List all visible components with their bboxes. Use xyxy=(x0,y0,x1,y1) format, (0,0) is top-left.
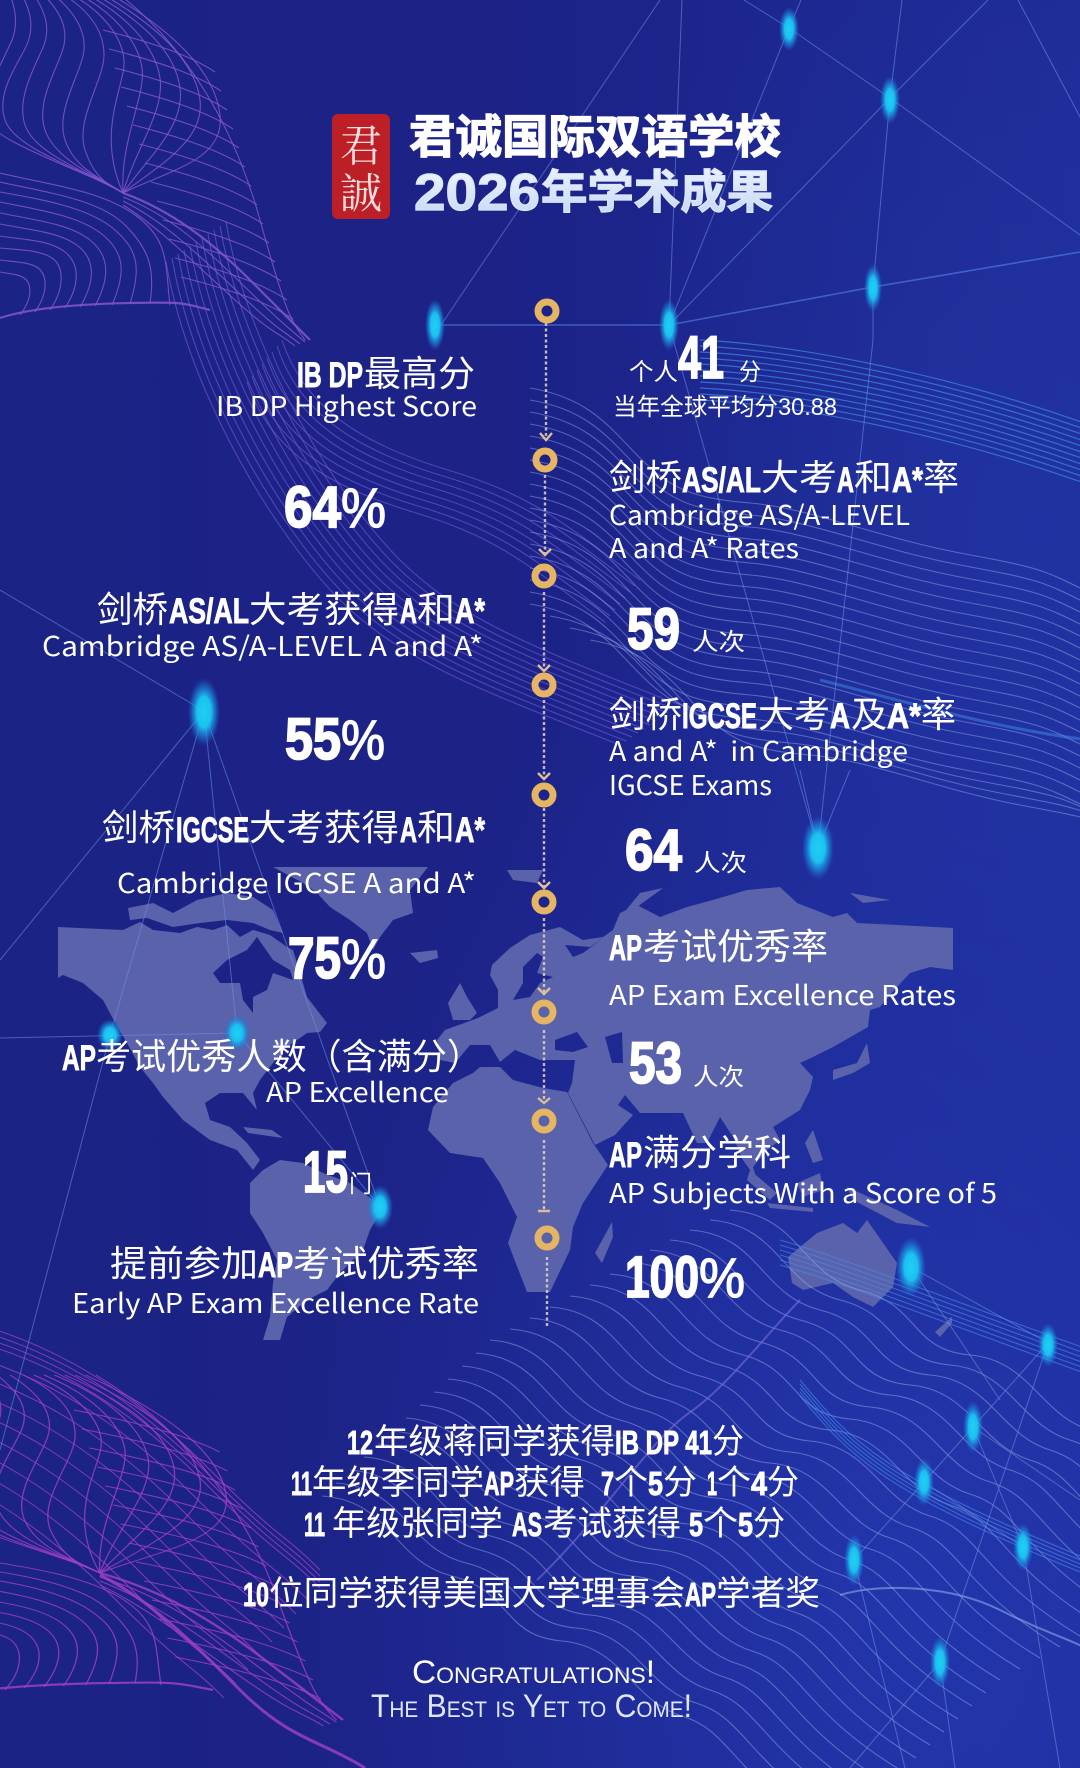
congratulations message xyxy=(371,1654,692,1724)
right: AP subjects with score of 5: AP xyxy=(609,1136,642,1175)
stat: 15 subjects: 门 xyxy=(349,1171,372,1198)
right: Cambridge AS/AL A and A* rates: 剑桥 xyxy=(609,457,682,498)
right: Cambridge IGCSE A and A* rates: A* xyxy=(887,697,921,736)
stat: 100%: % xyxy=(699,1246,745,1309)
student achievements: 获得 xyxy=(514,1464,585,1502)
student achievements: 11 xyxy=(291,1465,312,1502)
right: Cambridge AS/AL A and A* rates: Cambridge AS/A-LEVEL xyxy=(609,494,910,533)
stat: 55% xyxy=(285,707,385,772)
student achievements: 5 xyxy=(689,1506,703,1543)
AP scholar award: AP xyxy=(685,1576,716,1613)
stat: 53 xyxy=(629,1031,744,1096)
student achievements: 年级蒋同学获得 xyxy=(374,1423,615,1461)
student achievements: 个 xyxy=(717,1464,751,1502)
stat: 64%: % xyxy=(341,476,386,539)
stat: individual 41 points: 个人 xyxy=(629,359,678,386)
right: Cambridge IGCSE A and A* rates xyxy=(609,694,956,803)
logo seal: 君 xyxy=(340,110,382,174)
student achievements: 7 xyxy=(601,1465,614,1502)
stat: 15 subjects: 15 xyxy=(303,1140,348,1205)
wave: right blue-white field xyxy=(530,388,1080,845)
left: IB DP highest score: IB DP xyxy=(297,356,363,395)
stat: 75% xyxy=(288,926,386,991)
stat: individual 41 points: 41 xyxy=(678,324,724,391)
stat: 75%: 75 xyxy=(288,926,341,991)
wave: purple top-left mesh xyxy=(0,0,310,346)
right: Cambridge IGCSE A and A* rates: 大考 xyxy=(758,694,830,735)
AP scholar award: 10 xyxy=(243,1576,269,1613)
left: Cambridge AS/AL A and A*: AS/AL xyxy=(169,592,249,631)
timeline with rings and arrows xyxy=(535,302,556,1327)
stat: 100%: 100 xyxy=(625,1245,699,1310)
right: Cambridge IGCSE A and A* rates: 及 xyxy=(851,694,887,735)
right: Cambridge AS/AL A and A* rates: 率 xyxy=(923,457,959,498)
left: Cambridge IGCSE A and A*: 大考获得 xyxy=(249,807,399,848)
left: AP excellence: 考试优秀人数（含满分） xyxy=(96,1036,482,1077)
stat: 64: 64 xyxy=(625,818,682,883)
stat: 55%: 55 xyxy=(285,707,341,772)
left: Cambridge AS/AL A and A*: 和 xyxy=(417,589,455,630)
right: AP subjects with score of 5: 满分学科 xyxy=(643,1132,791,1173)
left: early AP excellence: Early AP Exam Excellence Rate xyxy=(72,1282,479,1321)
title: 君诚国际双语学校 xyxy=(409,101,781,167)
left: Cambridge AS/AL A and A*: A* xyxy=(455,592,485,631)
left: Cambridge AS/AL A and A*: Cambridge AS/A-LEVEL A and A* xyxy=(42,625,483,664)
right: Cambridge AS/AL A and A* rates: 和 xyxy=(854,457,892,498)
left: Cambridge IGCSE A and A*: A xyxy=(400,811,417,850)
left: AP excellence: AP Excellence xyxy=(266,1071,449,1110)
left: IB DP highest score: 最高分 xyxy=(364,353,475,394)
student achievements: 年级李同学 xyxy=(312,1464,484,1502)
wave: bottom-right bright strands xyxy=(537,1240,1080,1650)
logo seal: 誠 xyxy=(340,161,382,221)
student achievements: 5 xyxy=(648,1465,663,1502)
left: early AP excellence: 提前参加 xyxy=(110,1243,258,1284)
wave: right bright blue ribbon xyxy=(700,340,1080,740)
title: 2026 xyxy=(414,164,540,222)
student achievements: 4 xyxy=(751,1465,768,1502)
right: Cambridge IGCSE A and A* rates: IGCSE Exams xyxy=(609,764,772,803)
left: IB DP highest score xyxy=(216,353,477,424)
student achievements: IB DP 41 xyxy=(615,1424,712,1461)
student achievements: 1 xyxy=(707,1465,717,1502)
student achievements: 12 xyxy=(347,1424,373,1461)
student achievements: 分 xyxy=(767,1464,799,1502)
left: IB DP highest score: IB DP Highest Score xyxy=(216,385,477,424)
right: Cambridge IGCSE A and A* rates: A and A* in Cambridge xyxy=(609,730,908,769)
left: AP excellence xyxy=(62,1036,482,1110)
left: Cambridge IGCSE A and A*: Cambridge IGCSE A and A* xyxy=(117,862,476,901)
left: Cambridge AS/AL A and A*: 大考获得 xyxy=(249,589,399,630)
AP scholar award: 学者奖 xyxy=(716,1575,820,1613)
stat: individual 41 points: 当年全球平均分30.88 xyxy=(613,394,837,421)
right: AP subjects with score of 5: AP Subjects With a Score of 5 xyxy=(609,1172,997,1211)
congratulations message: Congratulations! xyxy=(412,1654,655,1690)
left: AP excellence: AP xyxy=(62,1039,96,1078)
right: Cambridge AS/AL A and A* rates: A xyxy=(837,461,854,500)
world map xyxy=(58,867,953,1340)
wave: bottom blue-white field xyxy=(322,1210,1080,1768)
right: Cambridge IGCSE A and A* rates: IGCSE xyxy=(682,697,757,736)
student achievements: AP xyxy=(484,1465,514,1502)
right: Cambridge AS/AL A and A* rates: AS/AL xyxy=(682,461,761,500)
right: AP exam excellence rates: 考试优秀率 xyxy=(643,926,828,967)
student achievements xyxy=(291,1423,799,1543)
stat: 64% xyxy=(284,475,386,540)
student achievements: 5 xyxy=(738,1506,753,1543)
congratulations message: The Best is Yet to Come! xyxy=(371,1688,692,1724)
student achievements: 个 xyxy=(703,1505,738,1543)
student achievements: 年级张同学 xyxy=(332,1505,503,1543)
left: Cambridge IGCSE A and A*: IGCSE xyxy=(176,811,249,850)
stat: 64%: 64 xyxy=(284,475,341,540)
stat: individual 41 points xyxy=(613,324,837,421)
left: Cambridge AS/AL A and A* xyxy=(42,589,485,664)
left: Cambridge IGCSE A and A* xyxy=(102,807,485,901)
stat: 53: 人次 xyxy=(693,1064,744,1091)
wave: magenta bottom-left mesh xyxy=(0,1328,365,1768)
student achievements: 考试获得 xyxy=(543,1505,681,1543)
stat: individual 41 points: 分 xyxy=(739,359,761,386)
right: Cambridge AS/AL A and A* rates xyxy=(609,457,959,566)
wave: purple ribbon through centre xyxy=(166,222,680,745)
student achievements: AS xyxy=(512,1506,542,1543)
right: Cambridge IGCSE A and A* rates: A xyxy=(830,697,850,736)
title: 年学术成果 xyxy=(541,156,773,222)
AP scholar award: 位同学获得美国大学理事会 xyxy=(269,1575,685,1613)
right: AP exam excellence rates: AP Exam Excellence Rates xyxy=(609,974,956,1013)
right: AP subjects with score of 5 xyxy=(609,1132,997,1211)
right: Cambridge AS/AL A and A* rates: A* xyxy=(892,461,923,500)
left: early AP excellence: 考试优秀率 xyxy=(293,1243,479,1284)
title xyxy=(409,101,781,222)
logo seal xyxy=(332,110,390,221)
left: early AP excellence xyxy=(72,1243,479,1321)
stat: 59: 59 xyxy=(627,597,680,662)
stat: 64: 人次 xyxy=(694,850,747,877)
stat: 75%: % xyxy=(341,927,386,990)
right: AP exam excellence rates: AP xyxy=(609,929,642,968)
student achievements: 分 xyxy=(712,1423,744,1461)
stat: 64 xyxy=(625,818,747,883)
right: AP exam excellence rates xyxy=(609,926,956,1013)
left: Cambridge IGCSE A and A*: 和 xyxy=(417,807,455,848)
student achievements: 个 xyxy=(614,1464,648,1502)
left: Cambridge IGCSE A and A*: A* xyxy=(455,811,485,850)
student achievements: 11 xyxy=(304,1506,325,1543)
left: early AP excellence: AP xyxy=(258,1246,293,1285)
left: Cambridge AS/AL A and A*: 剑桥 xyxy=(97,589,168,630)
stat: 55%: % xyxy=(341,708,385,771)
left: Cambridge AS/AL A and A*: A xyxy=(400,592,417,631)
stat: 59 xyxy=(627,597,745,662)
student achievements: 分 xyxy=(753,1505,785,1543)
stat: 59: 人次 xyxy=(692,629,745,656)
right: Cambridge AS/AL A and A* rates: A and A* Rates xyxy=(609,527,799,566)
right: Cambridge AS/AL A and A* rates: 大考 xyxy=(761,457,837,498)
student achievements: 分 xyxy=(663,1464,697,1502)
right: Cambridge IGCSE A and A* rates: 率 xyxy=(921,694,956,735)
right: Cambridge IGCSE A and A* rates: 剑桥 xyxy=(609,694,682,735)
left: Cambridge IGCSE A and A*: 剑桥 xyxy=(102,807,175,848)
stat: 53: 53 xyxy=(629,1031,682,1096)
